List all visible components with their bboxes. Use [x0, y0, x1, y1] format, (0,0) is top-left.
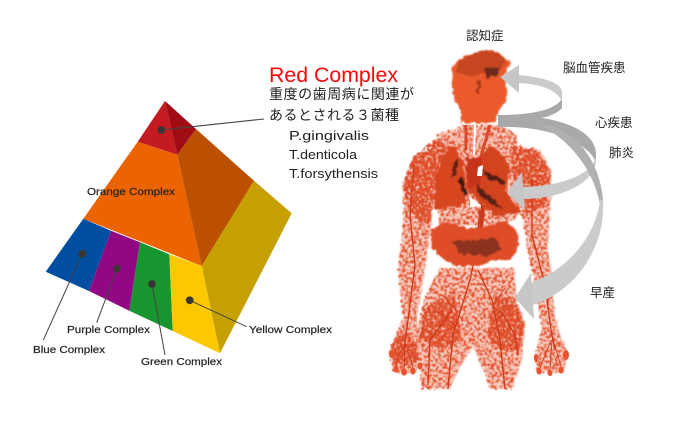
organ: aorta [480, 205, 483, 240]
pyramid tier: green complex [129, 242, 173, 331]
leader line: purple complex [97, 265, 121, 323]
fingertips [389, 350, 569, 376]
description line 2: あるとされる３菌種 [269, 107, 399, 123]
pyramid tier: purple complex [89, 231, 140, 311]
label: orange complex: Orange Complex [87, 186, 176, 198]
leader line: green complex [148, 280, 165, 355]
pyramid tier: red complex [138, 101, 196, 155]
organ: lungs and heart [433, 145, 521, 216]
label: blue complex: Blue Complex [33, 344, 106, 356]
leader line: blue complex [43, 250, 86, 340]
organ: neck vessels [466, 125, 490, 160]
illustration: human vascular system [389, 50, 569, 389]
pyramid tier: blue complex [46, 219, 111, 291]
leader line: yellow complex [186, 296, 247, 327]
label: cerebrovascular disease: 脳血管疾患 [563, 60, 626, 75]
organ: head [452, 50, 510, 123]
body: lacy peripheral vessels [389, 125, 568, 389]
species: T.denticola: T.denticola [289, 147, 358, 162]
label: premature birth: 早産 [590, 286, 615, 300]
label: green complex: Green Complex [141, 356, 223, 368]
species: P.gingivalis: P.gingivalis [289, 128, 370, 143]
label: heart disease: 心疾患 [595, 116, 633, 130]
species: T.forsythensis: T.forsythensis [289, 166, 379, 181]
pyramid tier: yellow complex [169, 254, 220, 353]
text block: red complex description [269, 64, 414, 181]
label: purple complex: Purple Complex [67, 324, 151, 336]
arrow: to uterus [515, 125, 603, 319]
heading: red complex: Red Complex [269, 64, 398, 87]
body: pale underlay of fine vessels [389, 125, 568, 389]
body: main arteries [396, 165, 561, 389]
organ: heart highlights [470, 165, 483, 207]
leader line: red complex [157, 119, 264, 134]
label: dementia: 認知症 [466, 29, 504, 43]
arrow: to heart and lungs [498, 115, 596, 210]
pyramid side: yellow complex shade [202, 181, 292, 353]
label: yellow complex: Yellow Complex [249, 324, 333, 336]
body: denser vessel areas [391, 138, 551, 366]
description line 1: 重度の歯周病に関連が [269, 86, 414, 102]
pyramid tier: orange complex [83, 129, 254, 266]
panel: complex pyramid [33, 101, 333, 368]
label: pneumonia: 肺炎 [609, 146, 634, 160]
organ: abdomen [431, 220, 520, 266]
arrow: to brain [498, 65, 562, 122]
